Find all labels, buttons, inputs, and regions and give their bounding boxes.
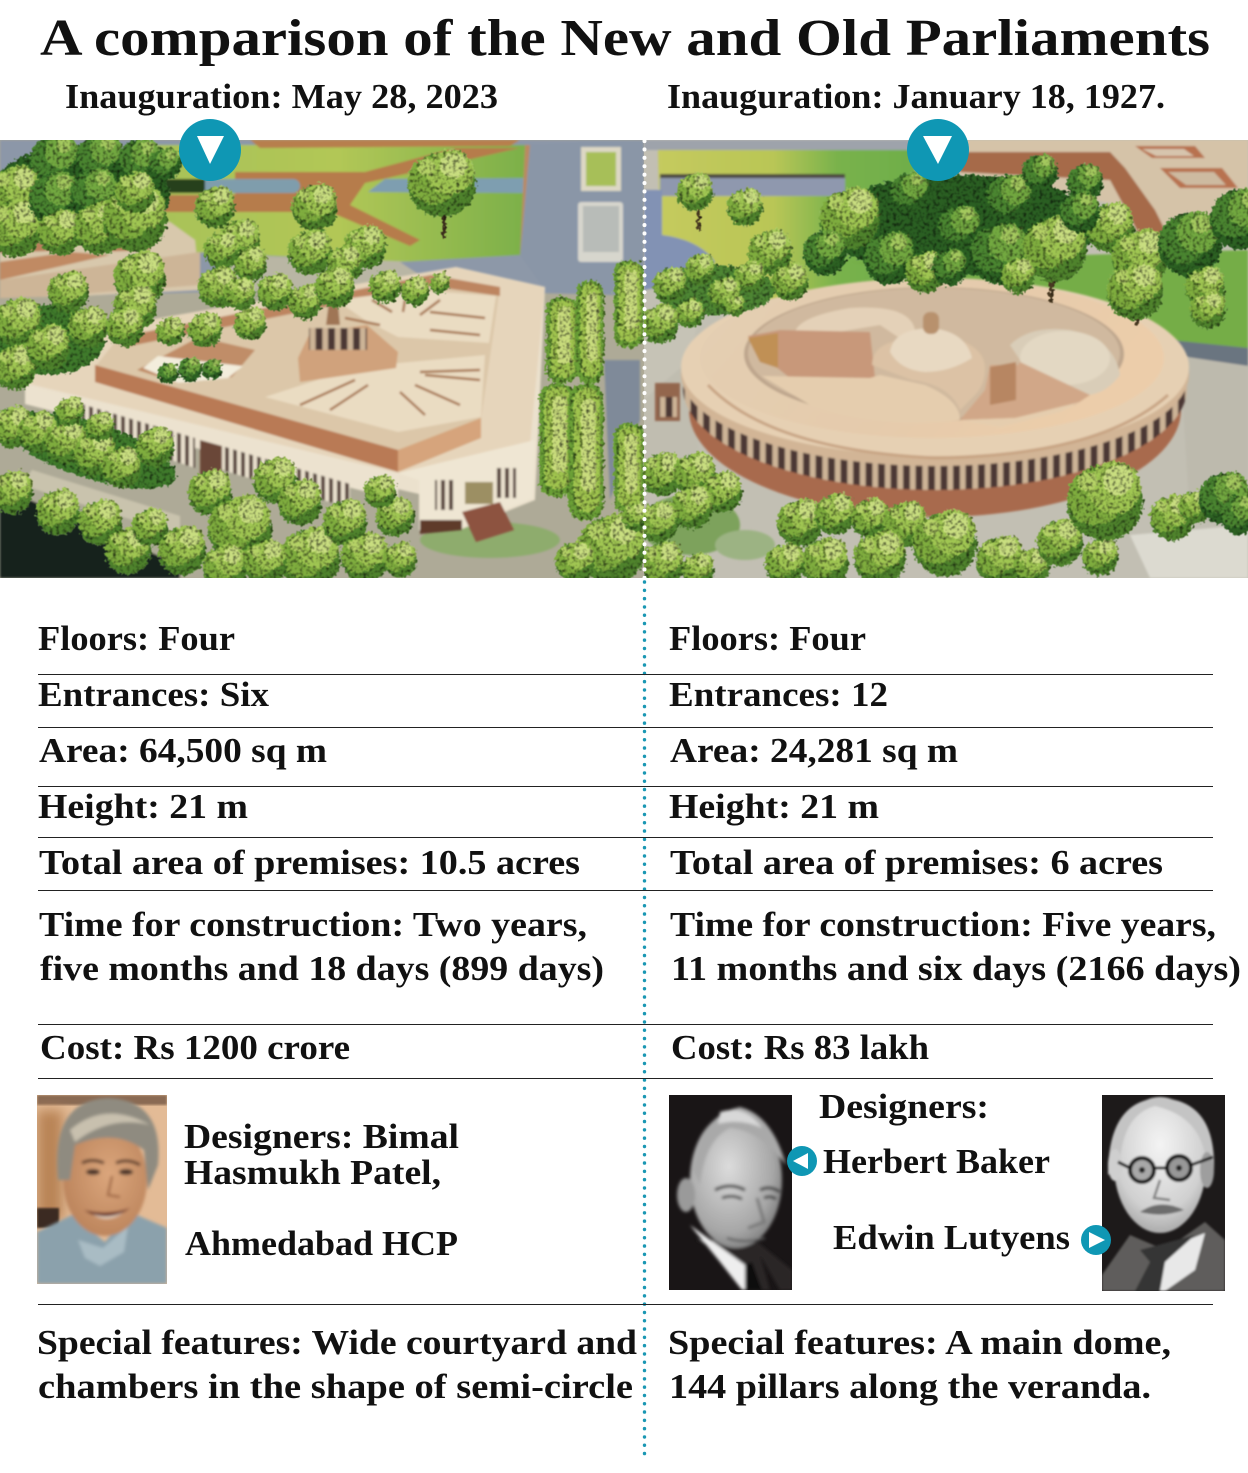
- comparison column: old parliament: [668, 620, 1241, 1406]
- aerial image: new parliament: [0, 133, 650, 590]
- portrait: Herbert Baker: [669, 1095, 792, 1290]
- building: triangular new parliament: [25, 267, 545, 542]
- special features: 144 pillars along the veranda.: [669, 1368, 1151, 1406]
- designer name: Edwin Lutyens: Edwin Lutyens: [833, 1219, 1070, 1257]
- floors: Floors: Four: [669, 620, 866, 658]
- designers: Hasmukh Patel,: [184, 1154, 441, 1192]
- construction time: 11 months and six days (2166 days): [671, 950, 1241, 988]
- special features: chambers in the shape of semi-circle: [38, 1368, 633, 1406]
- premises: Total area of premises: 10.5 acres: [39, 844, 580, 882]
- premises: Total area of premises: 6 acres: [670, 844, 1163, 882]
- entrances: Entrances: 12: [669, 676, 888, 714]
- icon: arrow to Herbert Baker: [787, 1146, 817, 1176]
- dotted divider: below image: [643, 582, 646, 1455]
- portrait: Bimal Hasmukh Patel: [37, 1095, 167, 1284]
- designers: Ahmedabad HCP: [185, 1225, 458, 1263]
- designer name: Herbert Baker: Herbert Baker: [823, 1143, 1050, 1181]
- portrait: Edwin Lutyens: [1102, 1095, 1225, 1291]
- height: Height: 21 m: [669, 788, 879, 826]
- special features: Special features: A main dome,: [668, 1324, 1171, 1362]
- dotted divider: over image: [642, 141, 646, 578]
- height: Height: 21 m: [38, 788, 248, 826]
- special features: Special features: Wide courtyard and: [37, 1324, 637, 1362]
- comparison column: new parliament: [37, 620, 637, 1406]
- trees: old parliament grounds: [638, 154, 1248, 588]
- floors: Floors: Four: [38, 620, 235, 658]
- cost: Cost: Rs 1200 crore: [40, 1029, 350, 1067]
- tree: tall lone tree by the pond: [408, 150, 476, 238]
- inauguration date: old parliament: Inauguration: January 18, 1927.: [667, 78, 1165, 116]
- designers: Designers: Bimal: [184, 1118, 459, 1156]
- area: Area: 64,500 sq m: [39, 732, 327, 770]
- designers heading: Designers:: [819, 1088, 989, 1126]
- icon: pin marker old parliament: [907, 119, 969, 181]
- aerial image: old parliament: [638, 140, 1248, 588]
- cost: Cost: Rs 83 lakh: [671, 1029, 929, 1067]
- area: Area: 24,281 sq m: [670, 732, 958, 770]
- trees: new parliament grounds: [0, 133, 650, 590]
- icon: pin marker new parliament: [179, 119, 241, 181]
- construction time: Time for construction: Five years,: [670, 906, 1216, 944]
- inauguration date: new parliament: Inauguration: May 28, 2023: [65, 78, 498, 116]
- construction time: Time for construction: Two years,: [39, 906, 587, 944]
- icon: arrow to Edwin Lutyens: [1081, 1225, 1111, 1255]
- title: A comparison of the New and Old Parliaments: [40, 10, 1210, 67]
- entrances: Entrances: Six: [38, 676, 270, 714]
- construction time: five months and 18 days (899 days): [40, 950, 604, 988]
- building: circular old parliament: [655, 278, 1189, 517]
